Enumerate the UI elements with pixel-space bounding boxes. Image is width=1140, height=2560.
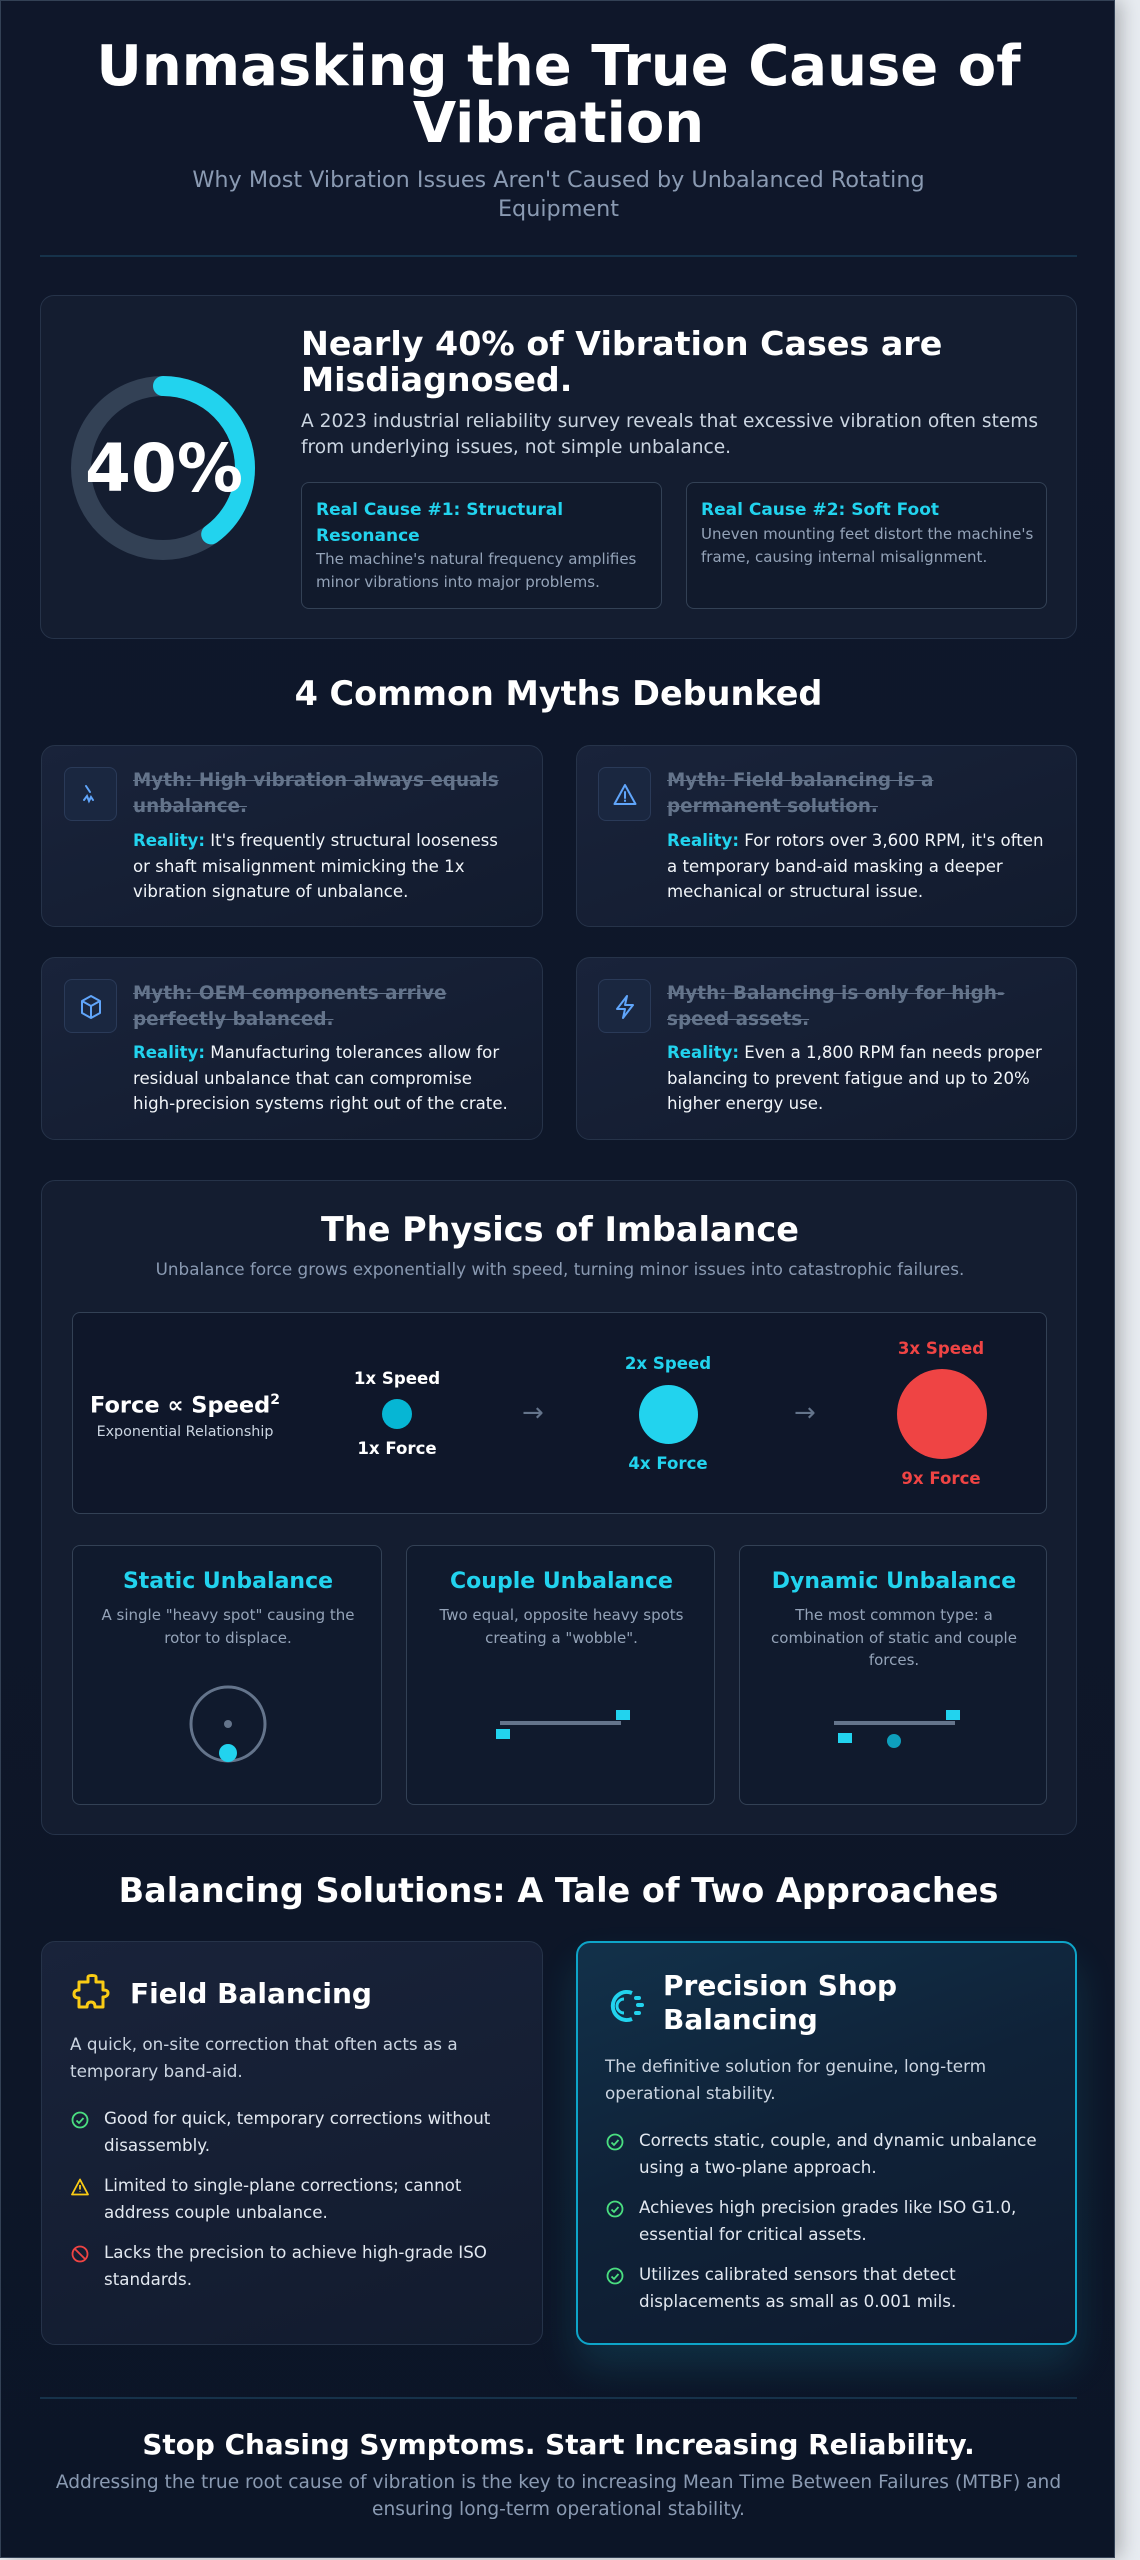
item: ban: Lacks the precision to achieve high-grade ISO xyxy=(104,2242,487,2262)
myth card 2: mechanical or structural issue. xyxy=(667,882,923,901)
myth card 1: Reality: It's frequently structural looseness xyxy=(133,831,498,850)
ring chart 40% xyxy=(71,376,255,560)
footer text xyxy=(56,2472,1061,2520)
formula: Force ∝ Speed2 xyxy=(90,1392,280,1418)
item: good xyxy=(72,2108,490,2154)
item: good: Good for quick, temporary corrections without xyxy=(104,2108,490,2128)
item 3: Utilizes calibrated sensors that detect xyxy=(639,2264,956,2284)
cause 1 xyxy=(301,482,662,609)
myth card 3: high-precision systems right out of the crate. xyxy=(133,1094,508,1113)
myth card 1: unbalance. xyxy=(133,796,247,817)
icon: lightning xyxy=(598,979,651,1033)
3x speed: 3x Speed xyxy=(898,1339,984,1358)
stat heading: Nearly 40% of Vibration Cases are xyxy=(301,324,942,363)
arrow: → xyxy=(522,1398,544,1428)
cause 1: Real Cause #1: Structural xyxy=(316,500,563,520)
formula xyxy=(90,1392,280,1440)
formula box: 9x Force xyxy=(901,1469,981,1488)
title xyxy=(96,34,1022,156)
myth card 4: higher energy use. xyxy=(667,1094,823,1113)
panel: precision shop balancing: Precision Shop xyxy=(663,1969,897,2002)
cause 1: minor vibrations into major problems. xyxy=(316,573,600,591)
card: dynamic xyxy=(739,1545,1047,1805)
myth card 4: Myth: Balancing is only for high- xyxy=(667,983,1004,1004)
card: static: A single "heavy spot" causing the xyxy=(102,1606,354,1624)
heading: solutions: Balancing Solutions: A Tale of Two Approaches xyxy=(119,1871,998,1910)
item 1 xyxy=(606,2130,1037,2176)
formula: Exponential Relationship xyxy=(97,1424,273,1440)
card: dynamic: The most common type: a xyxy=(795,1606,993,1624)
icon: cube xyxy=(64,979,117,1033)
icon: static rotor xyxy=(190,1686,266,1762)
panel: precision shop balancing: The definitive solution for genuine, long-term xyxy=(605,2056,986,2076)
icon: gear xyxy=(610,1990,644,2022)
myth card 3 xyxy=(41,957,543,1140)
item 2: Achieves high precision grades like ISO G1.0, xyxy=(639,2197,1016,2217)
cause 2 xyxy=(686,482,1047,609)
myth card 2: Reality: For rotors over 3,600 RPM, it's often xyxy=(667,831,1043,850)
card: dynamic: Dynamic Unbalance xyxy=(772,1569,1016,1594)
subtitle: Why Most Vibration Issues Aren't Caused by Unbalanced Rotating xyxy=(192,167,925,193)
formula box: 1x Force xyxy=(357,1439,437,1458)
cause 1: Resonance xyxy=(316,526,420,546)
card: couple xyxy=(406,1545,715,1805)
cause 2: Real Cause #2: Soft Foot xyxy=(701,500,939,520)
item: ban xyxy=(72,2242,487,2288)
card: couple: Two equal, opposite heavy spots xyxy=(440,1606,683,1624)
panel: precision shop balancing: operational stability. xyxy=(605,2082,776,2102)
icon: puzzle xyxy=(72,1974,110,2008)
icon: couple rotor xyxy=(496,1710,630,1739)
myth card 4: balancing to prevent fatigue and up to 20% xyxy=(667,1068,1030,1088)
myth card 1: Myth: High vibration always equals xyxy=(133,770,499,791)
item 1: Corrects static, couple, and dynamic unbalance xyxy=(639,2130,1037,2150)
card: static: rotor to displace. xyxy=(164,1628,292,1646)
card: dynamic: forces. xyxy=(869,1651,919,1669)
title: Unmasking the True Cause of xyxy=(96,34,1021,99)
item 1: using a two-plane approach. xyxy=(639,2156,877,2176)
panel: field balancing: temporary band-aid. xyxy=(70,2060,243,2080)
item: warning: Limited to single-plane corrections; cannot xyxy=(104,2175,461,2195)
title: Vibration xyxy=(413,91,704,156)
myth card 1: or shaft misalignment mimicking the 1x xyxy=(133,856,465,876)
formula box xyxy=(72,1312,1047,1514)
myth card 2: a temporary band-aid masking a deeper xyxy=(667,856,1003,876)
subtitle: Equipment xyxy=(498,196,619,222)
stat heading xyxy=(301,324,942,399)
myth card 1: vibration signature of unbalance. xyxy=(133,882,408,901)
cause 2: Uneven mounting feet distort the machine's xyxy=(701,525,1033,543)
cause 1: The machine's natural frequency amplifies xyxy=(316,550,636,568)
cause 2: frame, causing internal misalignment. xyxy=(701,548,987,566)
myth card 4: speed assets. xyxy=(667,1009,809,1030)
card: static xyxy=(72,1545,382,1805)
myth card 2 xyxy=(576,745,1077,927)
myth card 2: Myth: Field balancing is a xyxy=(667,770,933,791)
panel: physics xyxy=(41,1180,1077,1835)
physics subtitle: Unbalance force grows exponentially with speed, turning minor issues into catastrophic failures. xyxy=(156,1259,964,1279)
panel: precision shop balancing xyxy=(576,1941,1077,2345)
myth card 4: Reality: Even a 1,800 RPM fan needs proper xyxy=(667,1043,1042,1062)
card: dynamic: combination of static and couple xyxy=(771,1628,1017,1646)
card: static: Static Unbalance xyxy=(123,1569,333,1594)
card: couple: Couple Unbalance xyxy=(450,1569,673,1594)
footer heading: Stop Chasing Symptoms. Start Increasing Reliability. xyxy=(142,2428,975,2461)
footer text: ensuring long-term operational stability. xyxy=(372,2498,745,2520)
footer text: Addressing the true root cause of vibration is the key to increasing Mean Time Between Failures (MTBF) and xyxy=(56,2472,1061,2493)
myth card 2: permanent solution. xyxy=(667,796,878,817)
1x speed: 1x Speed xyxy=(354,1369,440,1388)
arrow: → xyxy=(794,1398,816,1428)
subtitle xyxy=(192,167,925,222)
myth card 1 xyxy=(41,745,543,927)
myth card 3: residual unbalance that can compromise xyxy=(133,1068,472,1088)
icon: vibration xyxy=(64,767,117,821)
item 3: displacements as small as 0.001 mils. xyxy=(639,2290,956,2310)
physics heading: The Physics of Imbalance xyxy=(321,1210,799,1249)
stat number: 40% xyxy=(85,430,243,507)
myth card 3: perfectly balanced. xyxy=(133,1009,333,1030)
card: couple: creating a "wobble". xyxy=(485,1628,638,1646)
panel: field balancing: Field Balancing xyxy=(130,1977,372,2010)
icon: dynamic rotor xyxy=(834,1710,960,1748)
2x speed: 2x Speed xyxy=(625,1354,711,1373)
myth card 3: Reality: Manufacturing tolerances allow for xyxy=(133,1043,499,1062)
item 2 xyxy=(606,2197,1016,2244)
panel: field balancing: A quick, on-site correction that often acts as a xyxy=(70,2034,458,2054)
item: good: disassembly. xyxy=(104,2134,210,2154)
myth card 4 xyxy=(576,957,1077,1140)
myth card 3: Myth: OEM components arrive xyxy=(133,983,446,1004)
item: warning: address couple unbalance. xyxy=(104,2202,328,2222)
panel: field balancing xyxy=(41,1941,543,2345)
item: ban: standards. xyxy=(104,2268,192,2288)
icon: warning xyxy=(598,767,651,821)
item 3 xyxy=(606,2264,956,2310)
stat paragraph: A 2023 industrial reliability survey reveals that excessive vibration often stems xyxy=(301,411,1038,432)
formula box: 4x Force xyxy=(628,1454,708,1473)
panel: stat xyxy=(40,295,1077,639)
stat paragraph: from underlying issues, not simple unbalance. xyxy=(301,436,731,458)
item 2: essential for critical assets. xyxy=(639,2224,867,2244)
stat paragraph xyxy=(301,411,1038,458)
heading: myths: 4 Common Myths Debunked xyxy=(295,674,822,713)
panel: precision shop balancing: Balancing xyxy=(663,2003,818,2036)
item: warning xyxy=(71,2175,462,2222)
stat heading: Misdiagnosed. xyxy=(301,360,572,399)
